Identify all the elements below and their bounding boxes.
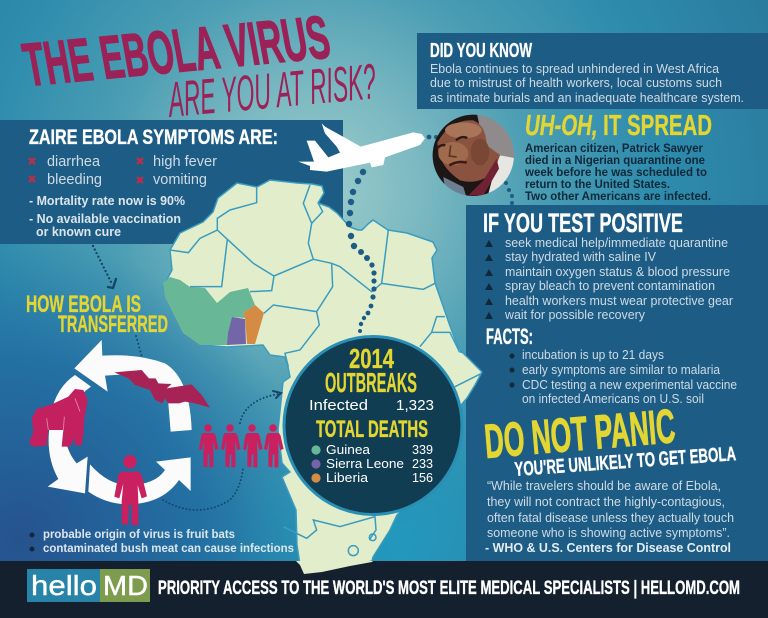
symptoms list	[29, 154, 217, 188]
text: Patrick Sawyer story: Two other Americans are infected.	[525, 189, 711, 203]
logo: helloMD: MD	[103, 570, 148, 601]
icon: infected person	[114, 455, 147, 525]
title	[18, 3, 378, 128]
panel: did you know	[417, 33, 768, 109]
symptoms list: vomiting	[153, 172, 207, 188]
icon: fruit bat	[114, 370, 210, 408]
quote: “While travelers should be aware of Ebola,	[487, 478, 721, 493]
transmission cycle arrows	[48, 340, 192, 504]
quote: someone who is showing active symptoms”.	[487, 525, 730, 540]
deaths legend: Liberia	[326, 471, 368, 485]
deaths legend: Sierra Leone	[326, 457, 404, 471]
transfer notes	[30, 527, 294, 555]
symptoms list: diarrhea	[47, 154, 101, 170]
did you know body: Ebola continues to spread unhindered in West Africa	[430, 61, 720, 76]
test positive list: health workers must wear protective gear	[505, 293, 734, 308]
arrow: people to circle	[240, 391, 281, 423]
test positive list	[504, 235, 734, 322]
mortality notes	[29, 194, 185, 239]
text: Patrick Sawyer story: return to the United States.	[525, 177, 670, 191]
mortality notes: - Mortality rate now is 90%	[29, 194, 185, 208]
mortality notes: or known cure	[36, 225, 121, 239]
deaths legend: 233	[412, 457, 433, 471]
outbreak region: Sierra Leone	[227, 317, 246, 345]
dots: plane to photo	[427, 135, 438, 139]
test positive list: spray bleach to prevent contamination	[505, 278, 715, 293]
text: ARE YOU AT RISK?	[165, 53, 378, 128]
icon: airplane	[298, 123, 425, 172]
quote: often fatal disease unless they actually touch	[487, 510, 734, 525]
text: Patrick Sawyer story: week before he was scheduled to	[524, 165, 707, 179]
deaths legend: Guinea	[326, 443, 370, 457]
facts heading: FACTS:	[486, 324, 533, 349]
symptoms list: bleeding	[47, 172, 102, 188]
facts list	[510, 347, 737, 406]
heading: how Ebola is transferred	[26, 291, 168, 338]
dotted link: heading to cycle	[136, 336, 142, 357]
icon: gorilla	[29, 389, 88, 447]
test positive list: seek medical help/immediate quarantine	[505, 235, 728, 250]
heading: uh-oh it spread: UH-OH, IT SPREAD	[525, 110, 712, 142]
warning icons	[485, 240, 493, 319]
footer	[0, 561, 768, 618]
icon: group of people	[199, 424, 284, 467]
outbreaks heading: 2014	[349, 343, 394, 374]
text: Patrick Sawyer story	[524, 141, 711, 203]
dotted flight path: plane to circle	[346, 169, 377, 333]
photo: Patrick Sawyer	[432, 114, 514, 196]
map: Africa	[163, 180, 482, 574]
test positive list: wait for possible recovery	[504, 307, 645, 322]
deaths legend: 339	[412, 443, 433, 457]
facts list: on infected Americans on U.S. soil	[522, 391, 704, 406]
did you know body: as intimate burials and an inadequate healthcare system.	[430, 90, 744, 105]
outbreak region: Liberia	[243, 305, 264, 344]
logo: helloMD: hello	[31, 570, 97, 601]
quote	[485, 478, 734, 555]
did you know body: due to mistrust of health workers, local customs such	[430, 75, 722, 90]
text: Patrick Sawyer story: died in a Nigerian quarantine one	[525, 153, 705, 167]
deaths legend	[311, 443, 433, 485]
symptoms heading: ZAIRE EBOLA SYMPTOMS ARE:	[29, 126, 278, 149]
dotted link: person to people	[163, 468, 243, 510]
heading: how Ebola is transferred: HOW EBOLA IS	[26, 291, 141, 318]
did you know heading: DID YOU KNOW	[430, 40, 532, 62]
heading: how Ebola is transferred: TRANSFERRED	[58, 311, 168, 338]
panel: 2014 outbreaks circle: 1,323	[396, 398, 434, 414]
facts list: CDC testing a new experimental vaccine	[522, 377, 737, 392]
panel: if you test positive	[466, 205, 768, 561]
infected count: Infected	[309, 398, 368, 414]
deaths legend: 156	[412, 471, 433, 485]
dots: photo to test panel	[504, 181, 514, 205]
facts list: incubation is up to 21 days	[522, 347, 664, 362]
logo: helloMD	[27, 569, 150, 602]
transfer notes: contaminated bush meat can cause infections	[43, 541, 294, 555]
country borders	[170, 185, 482, 556]
symptoms list: high fever	[153, 154, 217, 170]
test positive list: maintain oxygen status & blood pressure	[505, 264, 730, 279]
test positive list: stay hydrated with saline IV	[505, 249, 656, 264]
west Africa outbreak region: Guinea	[163, 277, 255, 345]
quote: they will not contract the highly-contagious,	[487, 494, 725, 509]
facts list: early symptoms are similar to malaria	[522, 362, 721, 377]
mortality notes: - No available vaccination	[29, 212, 181, 226]
quote: - WHO & U.S. Centers for Disease Control	[485, 540, 731, 555]
panel: symptoms	[0, 120, 343, 244]
did you know body	[430, 61, 744, 105]
transfer notes: probable origin of virus is fruit bats	[43, 527, 235, 541]
arrow: symptoms to transfer	[93, 246, 116, 288]
panel: 2014 outbreaks circle	[284, 336, 462, 514]
panel: 2014 outbreaks circle: OUTBREAKS	[325, 367, 417, 398]
total deaths heading: TOTAL DEATHS	[316, 416, 428, 443]
text: Patrick Sawyer story: American citizen, Patrick Sawyer	[525, 141, 703, 155]
